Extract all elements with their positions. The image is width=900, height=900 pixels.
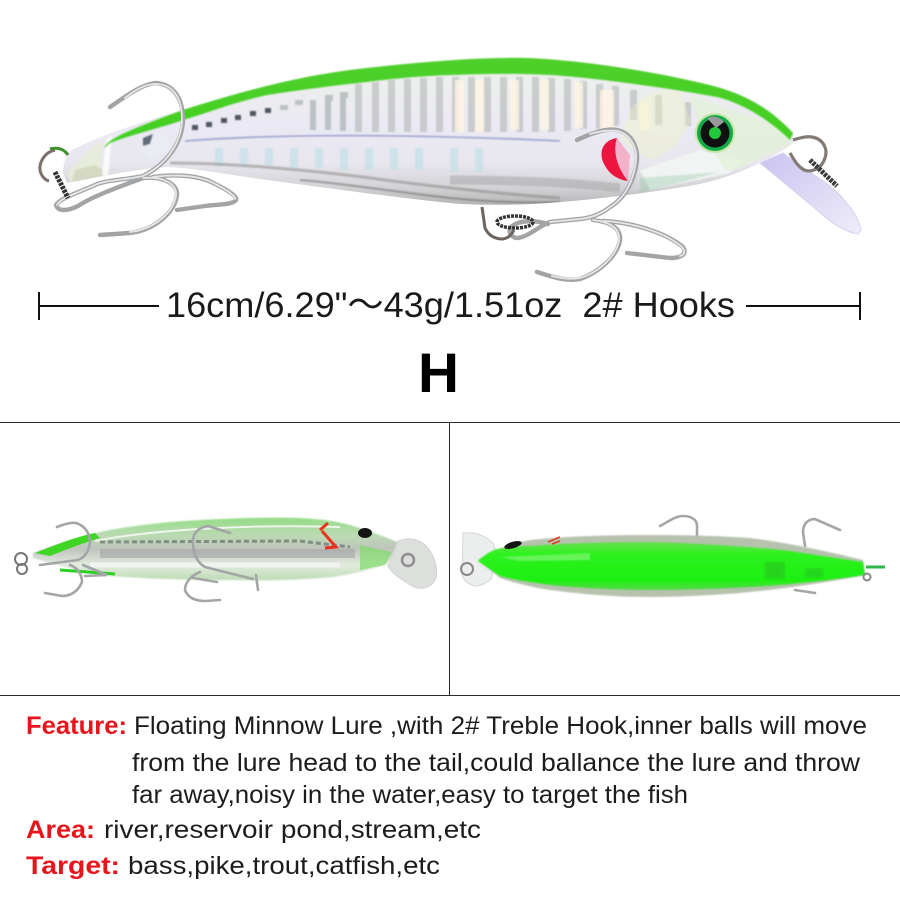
size line: right bracket xyxy=(746,292,860,320)
green back stripe xyxy=(104,58,793,148)
lure lip xyxy=(760,153,861,234)
small lure red gill xyxy=(320,523,336,548)
feature line 1: Floating Minnow Lure ,with 2# Treble Hook,inner balls will move xyxy=(134,712,867,740)
feature label: Feature: xyxy=(26,712,127,740)
top view rings xyxy=(461,563,885,580)
top view neon green back xyxy=(478,542,865,590)
top view lip xyxy=(462,533,495,586)
target text: bass,pike,trout,catfish,etc xyxy=(128,852,440,880)
panel: top view lure xyxy=(461,516,885,597)
top view red gill xyxy=(548,537,560,544)
top view body xyxy=(478,535,865,597)
eye xyxy=(695,113,735,153)
front treble hook xyxy=(510,130,685,280)
main lure photo xyxy=(40,58,861,280)
feature line 3: far away,noisy in the water,easy to target the fish xyxy=(132,781,688,809)
feature line 2: from the lure head to the tail,could ballance the lure and throw xyxy=(132,749,861,777)
target row xyxy=(26,852,440,880)
top view highlights xyxy=(500,553,823,579)
tail ring xyxy=(40,148,68,198)
red gill xyxy=(602,138,628,181)
area row xyxy=(26,816,481,844)
variant letter H: H xyxy=(418,341,459,404)
area label: Area: xyxy=(26,816,95,844)
small lure detail xyxy=(35,526,392,574)
target label: Target: xyxy=(26,852,120,880)
nose ring xyxy=(790,137,837,186)
size line: left bracket xyxy=(39,292,159,320)
small lure lip xyxy=(388,539,436,588)
area text: river,reservoir pond,stream,etc xyxy=(104,816,481,844)
small lure body xyxy=(33,518,397,580)
feature description xyxy=(26,712,867,809)
size text: 16cm/6.29"～43g/1.51oz 2# Hooks xyxy=(166,286,735,325)
panel frame xyxy=(0,422,900,696)
small lure lip ring xyxy=(402,554,414,566)
rear treble hook xyxy=(56,83,236,235)
belly hanger and split ring xyxy=(482,207,533,239)
small lure hooks xyxy=(15,523,258,601)
body stripes and scales xyxy=(68,77,790,202)
top view hooks xyxy=(660,516,840,593)
top view eye xyxy=(503,539,523,551)
lure body xyxy=(63,58,793,205)
small lure eye xyxy=(358,528,372,538)
panel: side view lure xyxy=(15,518,436,601)
